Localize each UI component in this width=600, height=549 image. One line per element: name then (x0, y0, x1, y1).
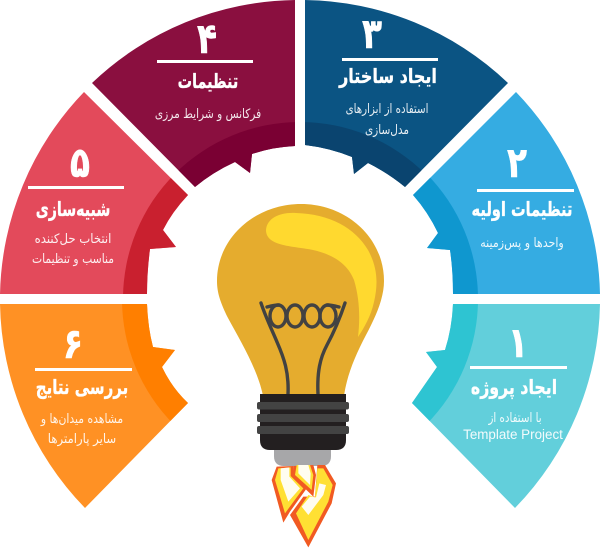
panel: step 5 simulation (0, 92, 188, 294)
panel: step 3 build geometry (305, 0, 508, 187)
description: step 1: Template Project (463, 427, 563, 442)
screw base (257, 394, 349, 466)
description: step 6: سایر پارامترها (48, 431, 116, 447)
panel: step 4 settings (92, 0, 295, 187)
rocket flames (272, 465, 336, 547)
panel: step 2 initial settings (413, 92, 600, 294)
heading: initial settings: تنظیمات اولیه (472, 199, 572, 222)
heading: build geometry: ایجاد ساختار (338, 65, 437, 89)
description: step 6: مشاهده میدان‌ها و (40, 411, 123, 427)
number 1: ۱ (508, 318, 528, 367)
panel: step 6 results (0, 304, 188, 508)
number 2: ۲ (507, 138, 527, 187)
description: step 1: با استفاده از (488, 410, 542, 426)
bulb highlight (266, 213, 376, 337)
heading: settings: تنظیمات (178, 71, 238, 94)
number 3: ۳ (362, 9, 382, 58)
description: step 3 (346, 101, 428, 138)
number 6: ۶ (63, 319, 83, 368)
number 5: ۵ (70, 138, 90, 187)
description: step 6 (40, 411, 123, 447)
description: step 4: فرکانس و شرایط مرزی (155, 106, 261, 122)
number 4: ۴ (197, 14, 217, 63)
heading: review results: بررسی نتایج (36, 377, 128, 400)
panel: step 1 create project (412, 304, 600, 508)
description: step 5: مناسب و تنظیمات (32, 251, 114, 267)
heading: create project: ایجاد پروژه (471, 376, 557, 400)
bulb glass (217, 204, 384, 396)
description: step 5: انتخاب حل‌کننده (35, 231, 111, 246)
description: step 1 (463, 410, 563, 442)
description: step 3: استفاده از ابزارهای (346, 101, 428, 117)
description: step 5 (32, 231, 114, 267)
filament (261, 303, 345, 394)
icon: light bulb rocket (217, 204, 384, 547)
description: step 3: مدل‌سازی (365, 122, 409, 138)
description: step 2: واحدها و پس‌زمینه (480, 235, 564, 251)
heading: simulation: شبیه‌سازی (36, 199, 110, 222)
